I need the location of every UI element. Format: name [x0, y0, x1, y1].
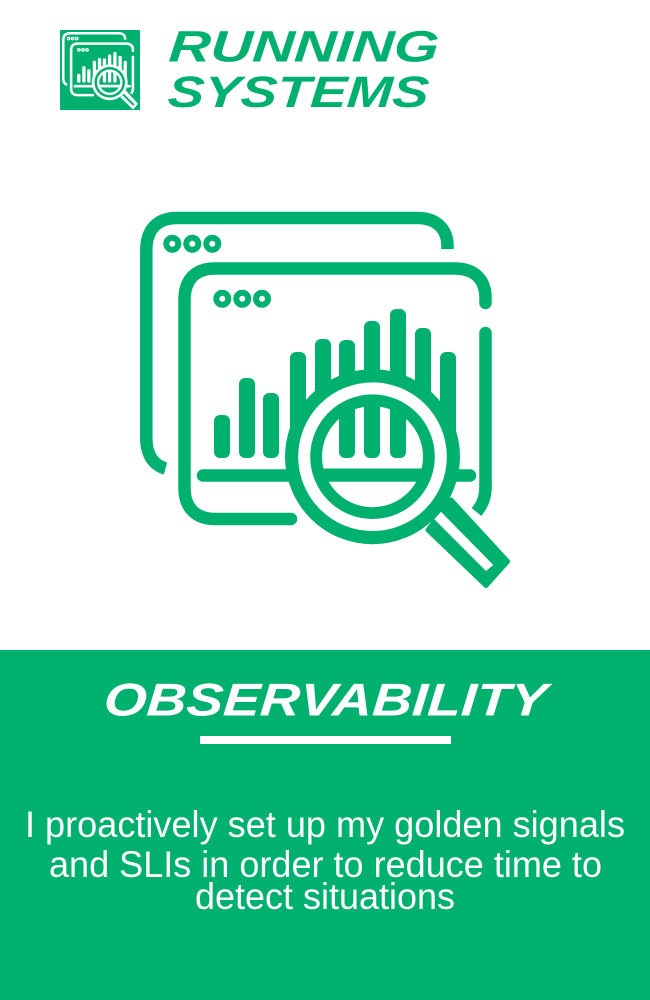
- brand line 2: SYSTEMS: [166, 68, 431, 117]
- panel background: [0, 650, 650, 1000]
- description line 1: I proactively set up my golden signals: [25, 804, 625, 845]
- heading: OBSERVABILITY: [102, 674, 554, 725]
- description line 2: and SLIs in order to reduce time to: [49, 844, 602, 885]
- panel: observability: [0, 650, 650, 1000]
- logo icon: windows with chart and magnifier: [63, 33, 137, 109]
- brand title: Running Systems: [166, 23, 441, 117]
- description text: [25, 804, 625, 917]
- description line 3: detect situations: [195, 876, 455, 917]
- heading underline: [200, 736, 451, 744]
- logo square: [60, 30, 140, 110]
- logo badge: [60, 30, 140, 110]
- brand line 1: RUNNING: [167, 23, 441, 72]
- main icon: windows with bar chart and magnifying glass: [146, 218, 508, 586]
